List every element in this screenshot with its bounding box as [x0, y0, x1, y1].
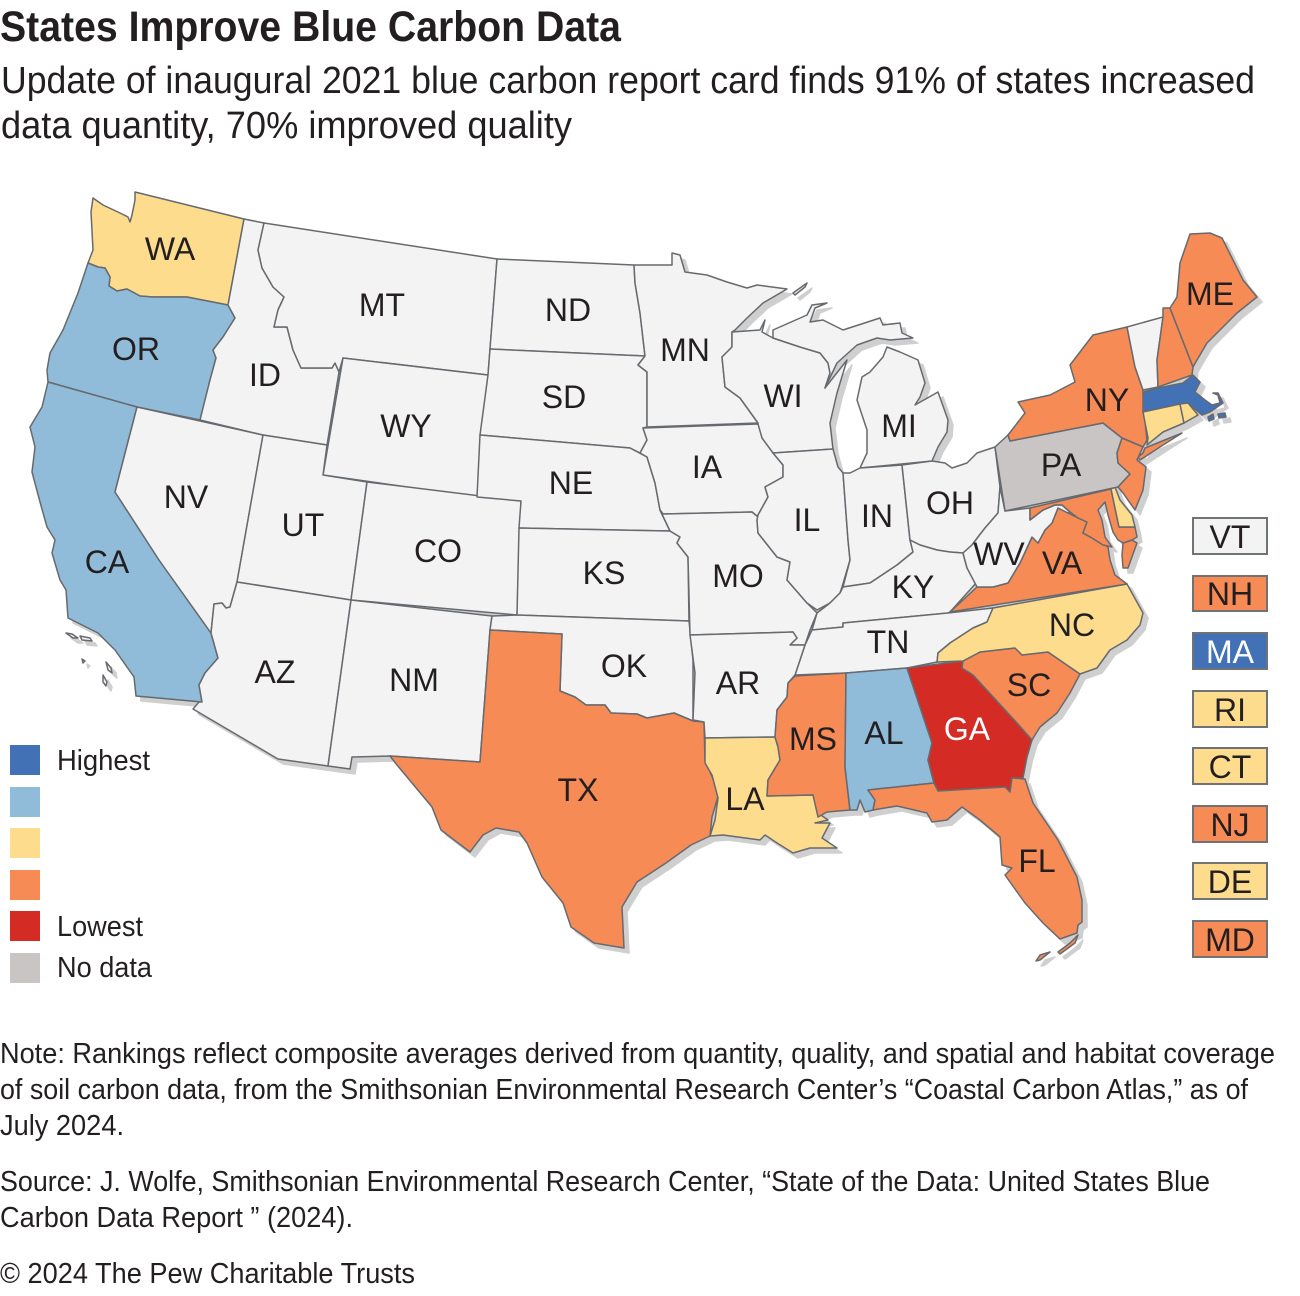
state: NJ: [1117, 438, 1146, 510]
state: IN: [843, 465, 913, 587]
key: CT: [1193, 748, 1267, 785]
state: OK: [490, 615, 693, 721]
state: FL keys: [1036, 935, 1078, 961]
label: NV: NV: [164, 479, 209, 515]
legend: lowest: [10, 911, 143, 943]
state: WV: [963, 487, 1070, 587]
legend: highest: [10, 745, 150, 777]
legend: no data: No data: [57, 952, 152, 984]
key: VT: [1193, 518, 1267, 555]
source: [0, 1166, 1210, 1234]
state: FL: [868, 778, 1082, 939]
state: KS: [517, 528, 689, 621]
state: NV: [115, 407, 263, 633]
label: ME: ME: [1186, 276, 1234, 312]
label: WA: WA: [145, 231, 196, 267]
label: AZ: AZ: [255, 654, 295, 690]
state: NH: [1157, 308, 1193, 387]
state: AL: [845, 668, 934, 812]
label: MO: MO: [712, 558, 764, 594]
key: DE: [1193, 863, 1267, 900]
key: VT: VT: [1210, 519, 1250, 555]
state: RI: [1180, 403, 1198, 423]
subtitle: Update of inaugural 2021 blue carbon report card finds 91% of states increased: [1, 60, 1255, 102]
state: AR: [690, 632, 805, 738]
note: July 2024.: [0, 1110, 124, 1142]
legend: fourth swatch: [10, 870, 40, 900]
source: Carbon Data Report ” (2024).: [0, 1202, 353, 1234]
label: IA: IA: [692, 449, 723, 485]
islands: [66, 283, 807, 686]
state: TX: [390, 630, 719, 948]
label: NM: NM: [389, 662, 439, 698]
state: LA: [705, 737, 837, 853]
title: States Improve Blue Carbon Data: [0, 3, 622, 51]
label: KS: KS: [583, 555, 625, 591]
state: KY: [812, 540, 977, 630]
state: WI: [722, 320, 847, 453]
state: SD: [480, 349, 647, 453]
label: AR: AR: [716, 665, 760, 701]
state: MI upper peninsula: [773, 303, 913, 388]
label: WV: WV: [973, 536, 1025, 572]
key: MD: [1193, 921, 1267, 958]
key: RI: RI: [1214, 692, 1246, 728]
state: MT: [258, 223, 497, 375]
label: TN: TN: [867, 624, 909, 660]
key: MA: MA: [1206, 634, 1255, 670]
state: ME: [1170, 233, 1257, 367]
key: NH: [1193, 576, 1267, 612]
legend: third swatch: [10, 828, 40, 858]
state: MO: [660, 510, 817, 645]
label: CO: CO: [414, 533, 462, 569]
label: LA: LA: [725, 781, 765, 817]
note: of soil carbon data, from the Smithsonian Environmental Research Center’s “Coastal Carbon Atlas,” as of: [0, 1074, 1248, 1106]
state: IL: [757, 449, 850, 610]
label: IL: IL: [794, 502, 820, 538]
islands: Massachusetts: [1208, 413, 1226, 421]
label: FL: FL: [1018, 843, 1056, 879]
label: SC: SC: [1007, 667, 1051, 703]
label: CA: CA: [85, 544, 130, 580]
label: MT: MT: [359, 287, 405, 323]
label: ND: ND: [545, 292, 591, 328]
subtitle: data quantity, 70% improved quality: [1, 105, 572, 147]
state: VA: [950, 508, 1127, 612]
label: GA: GA: [944, 711, 991, 747]
state: AZ: [193, 582, 351, 766]
state: ID: [200, 219, 339, 445]
label: ID: ID: [249, 357, 281, 393]
state: OR: [47, 263, 235, 420]
state: MI lower peninsula: [857, 347, 948, 468]
map of US states: [30, 192, 1257, 961]
key: NJ: [1193, 806, 1267, 843]
state: WY: [323, 358, 488, 497]
label: MS: MS: [789, 721, 837, 757]
label: WI: WI: [763, 378, 803, 414]
label: NY: NY: [1085, 382, 1129, 418]
state: SC: [962, 648, 1080, 740]
key: NJ: NJ: [1210, 807, 1250, 843]
label: IN: IN: [861, 498, 893, 534]
label: MN: MN: [660, 332, 710, 368]
note: Note: Rankings reflect composite averages derived from quantity, quality, and spatial and habitat coverage: [0, 1038, 1275, 1070]
state: PA: [995, 423, 1130, 511]
state: MS: [767, 673, 850, 817]
label: SD: SD: [542, 379, 586, 415]
label: MI: MI: [881, 408, 917, 444]
source: Source: J. Wolfe, Smithsonian Environmental Research Center, “State of the Data: United States Blue: [0, 1166, 1210, 1198]
subtitle: [1, 60, 1255, 147]
state: CT: [1143, 404, 1184, 445]
key: MD: MD: [1205, 922, 1255, 958]
key: DE: DE: [1208, 864, 1252, 900]
label: OH: OH: [926, 485, 974, 521]
state: ND: [490, 259, 645, 356]
key: NH: NH: [1207, 576, 1253, 612]
state: CA: [30, 382, 218, 702]
copyright: © 2024 The Pew Charitable Trusts: [0, 1258, 415, 1290]
legend: second swatch: [10, 787, 40, 817]
label: TX: TX: [558, 772, 598, 808]
small-state key boxes: [1193, 518, 1267, 958]
key: MA: [1193, 633, 1267, 670]
state: VA eastern shore: [1122, 540, 1137, 568]
state: DE: [1111, 487, 1135, 527]
label: NC: NC: [1049, 607, 1095, 643]
legend: no data: [10, 952, 152, 984]
state: UT: [237, 435, 367, 600]
state: CO: [351, 482, 521, 615]
note: [0, 1038, 1275, 1142]
key: RI: [1193, 691, 1267, 728]
label: NE: NE: [549, 465, 593, 501]
label: UT: UT: [282, 507, 324, 543]
legend: lowest: Lowest: [57, 911, 143, 943]
state: NY: [1008, 327, 1147, 447]
label: OR: OR: [112, 331, 160, 367]
state: NY Long Island: [1138, 433, 1182, 460]
state: NM: [328, 600, 492, 769]
label: PA: PA: [1041, 447, 1082, 483]
state labels: [85, 231, 1234, 879]
state: OH: [902, 447, 1000, 553]
state: NE: [477, 435, 670, 531]
label: OK: OK: [601, 648, 647, 684]
label: KY: KY: [892, 569, 934, 605]
legend: [10, 745, 152, 984]
legend: highest: Highest: [57, 745, 150, 777]
label: WY: WY: [380, 408, 432, 444]
key: CT: CT: [1209, 749, 1251, 785]
state: GA: [907, 661, 1032, 792]
label: VA: VA: [1042, 545, 1083, 581]
state: MD: [1030, 489, 1137, 547]
state: MA: [1143, 375, 1223, 415]
state: NC: [937, 584, 1143, 674]
state: WA: [88, 192, 244, 305]
state: IA: [640, 424, 783, 517]
label: AL: AL: [864, 715, 904, 751]
state: TN: [795, 608, 993, 675]
state: VT: [1127, 317, 1163, 390]
state: MN: [634, 253, 787, 427]
